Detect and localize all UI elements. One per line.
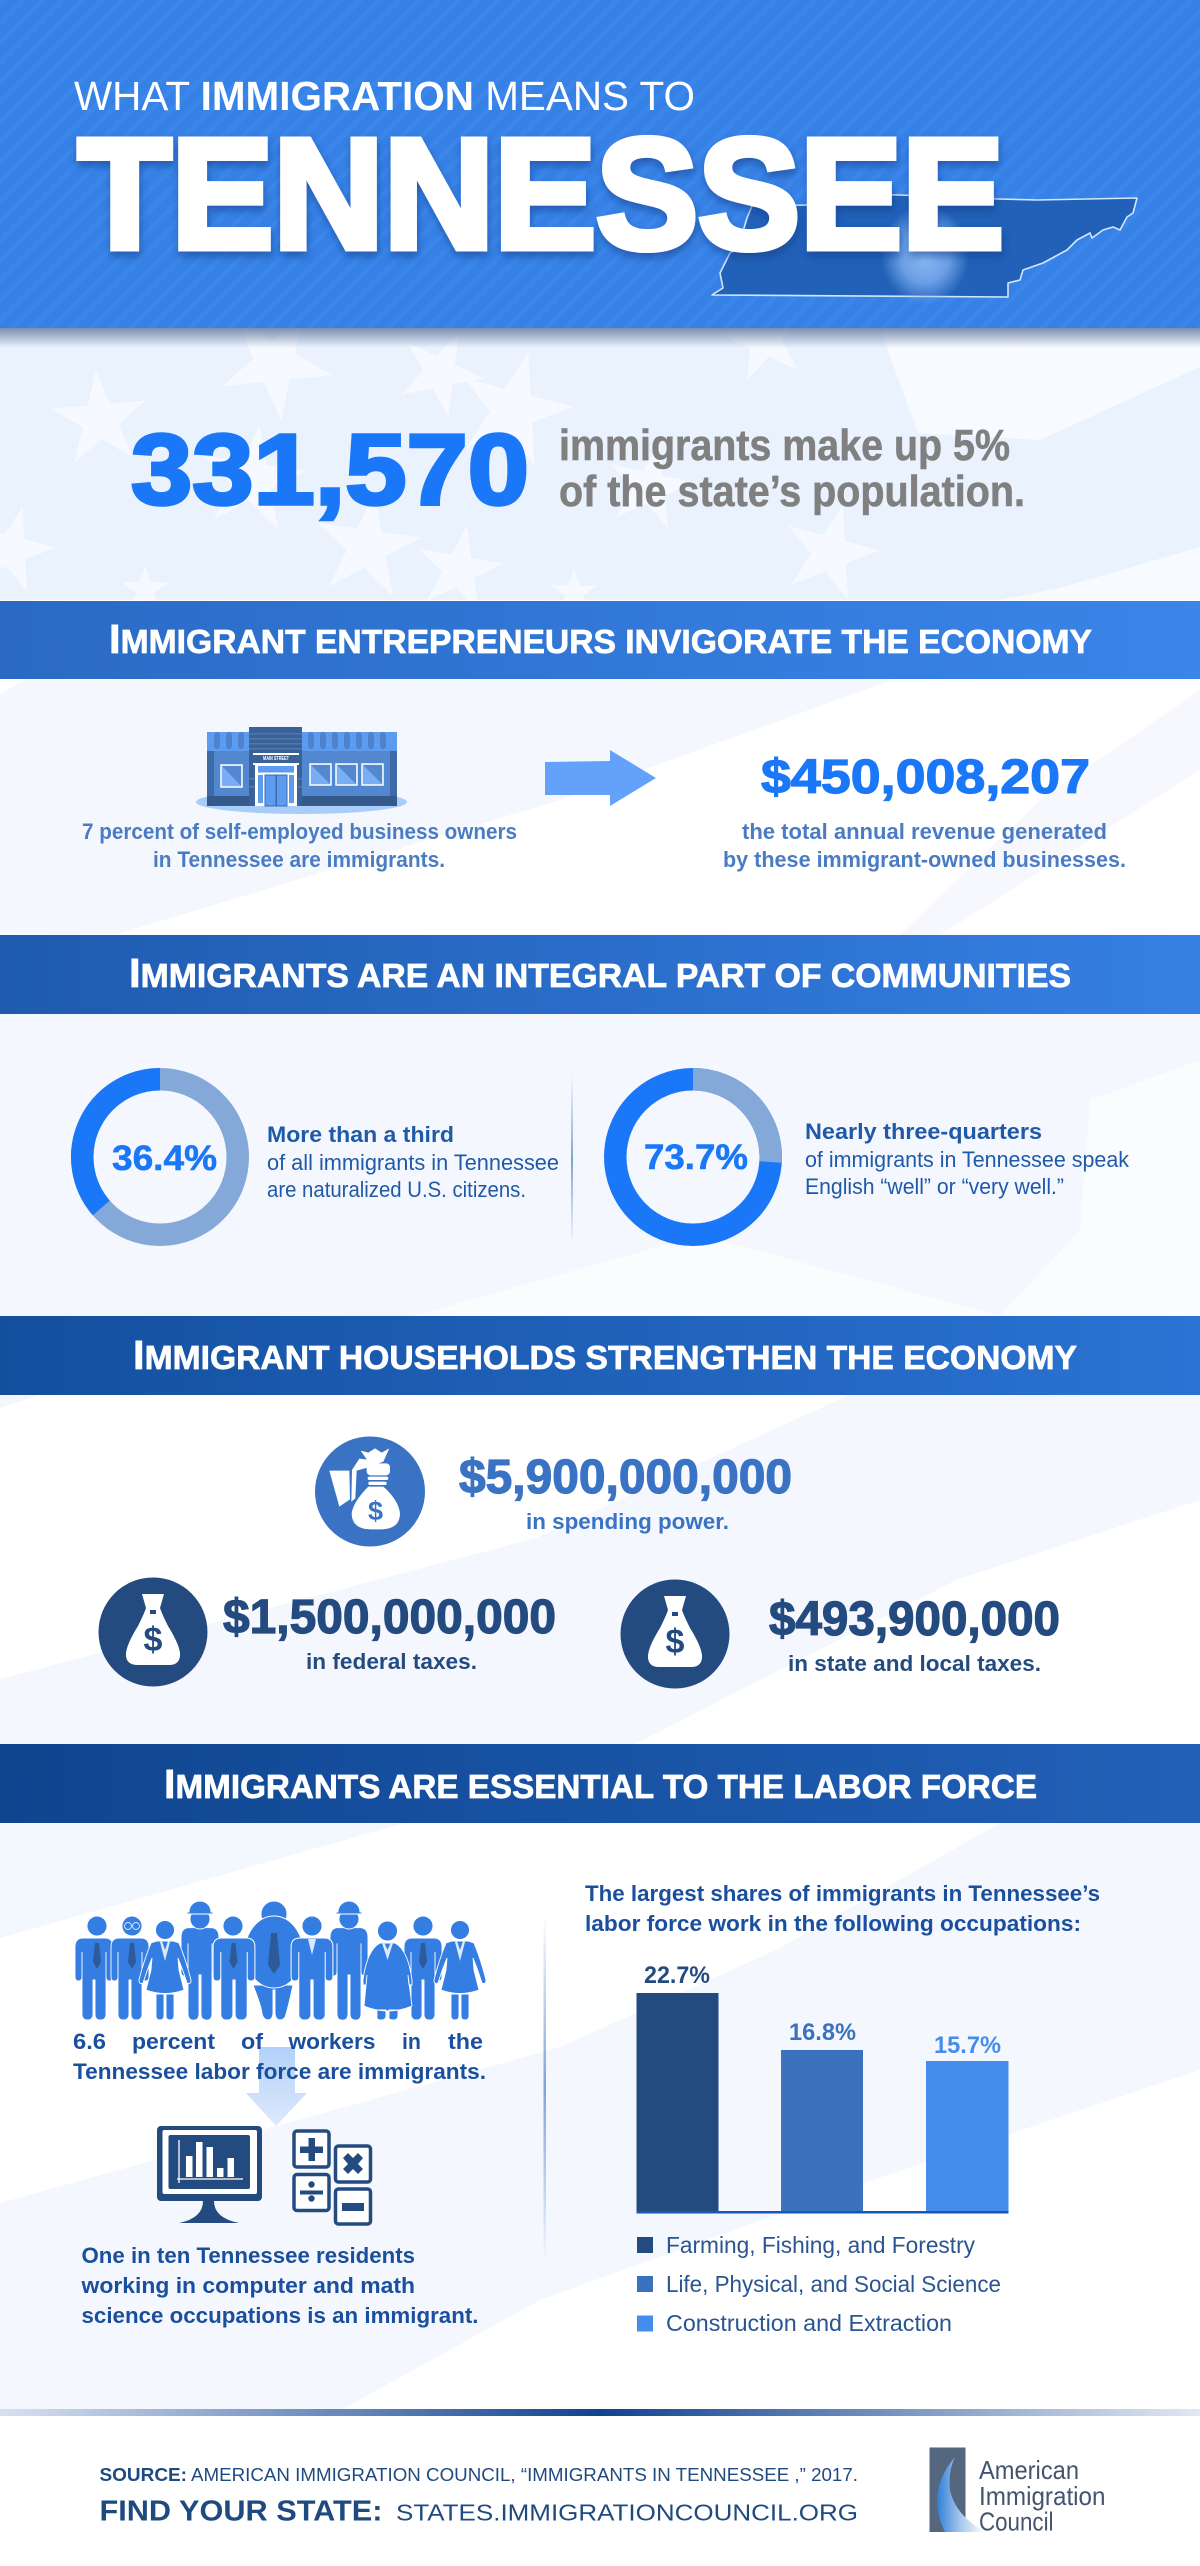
section heading: entrepreneurs (0, 601, 1200, 679)
title state name: TENNESSEE (78, 107, 1004, 282)
panel: entrepreneurs (82, 727, 1126, 872)
donut chart: 36.4 percent (82, 1079, 238, 1235)
revenue description: the total annual revenue generated (742, 819, 1107, 844)
divider (544, 1913, 546, 2263)
find your state line: STATES.IMMIGRATIONCOUNCIL.ORG (396, 2500, 858, 2526)
section heading: labor force: IMMIGRANTS ARE ESSENTIAL TO THE LABOR FORCE (164, 1761, 1037, 1807)
chart legend: Construction and Extraction (666, 2310, 952, 2336)
bar chart: occupations: 16.8% (789, 2019, 856, 2046)
section heading: households: IMMIGRANT HOUSEHOLDS STRENGTHEN THE ECONOMY (133, 1332, 1077, 1378)
down arrow (246, 2047, 307, 2126)
citizens text: of all immigrants in Tennessee (267, 1150, 559, 1175)
icon: computer monitor with chart (157, 2126, 262, 2223)
computer and math text: working in computer and math (80, 2273, 415, 2298)
shop sign: MAIN STREET (263, 756, 289, 762)
computer and math text: One in ten Tennessee residents (82, 2243, 415, 2268)
section heading: households (0, 1316, 1200, 1395)
title kicker: WHAT IMMIGRATION MEANS TO (74, 73, 695, 119)
labor force share text: workers (287, 2029, 376, 2054)
state taxes label: in state and local taxes. (788, 1651, 1041, 1676)
federal taxes label: in federal taxes. (306, 1649, 477, 1674)
logo: American Immigration Council: American (979, 2455, 1079, 2485)
section heading: communities (0, 935, 1200, 1014)
English text: English “well” or “very well.” (805, 1174, 1064, 1199)
citizens text: are naturalized U.S. citizens. (267, 1177, 526, 1202)
spending power figure: $5,900,000,000 (459, 1451, 792, 1504)
bar chart: occupations: 22.7% (644, 1962, 710, 1989)
icon: money bag, federal: $ (144, 1621, 163, 1659)
revenue description (723, 819, 1126, 872)
labor force share text: percent (132, 2029, 216, 2054)
computer and math text (80, 2243, 479, 2328)
icon: money bag, federal (98, 1578, 208, 1686)
section heading: entrepreneurs: IMMIGRANT ENTREPRENEURS INVIGORATE THE ECONOMY (109, 616, 1092, 662)
English text (805, 1119, 1130, 1199)
labor force share text: the (448, 2029, 483, 2054)
map of Tennessee (712, 194, 1137, 305)
business owners text: 7 percent of self-employed business owners (82, 819, 517, 844)
computer and math text: science occupations is an immigrant. (82, 2303, 478, 2328)
icon: money bag, state (620, 1580, 730, 1688)
icon: hand holding money bag: $ (368, 1496, 383, 1526)
business owners text: in Tennessee are immigrants. (153, 847, 445, 872)
icon: money bag, state: $ (666, 1623, 685, 1661)
occupations heading: labor force work in the following occupations: (585, 1911, 1081, 1936)
spending power label: in spending power. (526, 1509, 729, 1534)
chart legend: Life, Physical, and Social Science (666, 2271, 1001, 2297)
labor force share text: of (241, 2029, 264, 2054)
icon: hand holding money bag (315, 1436, 425, 1546)
chart legend: Farming, Fishing, and Forestry (666, 2232, 975, 2258)
population share text: of the state’s population. (559, 467, 1025, 516)
icon: math symbols (294, 2131, 370, 2224)
panel: communities (82, 1075, 1130, 1245)
labor force share text (73, 2029, 486, 2084)
divider (571, 1075, 573, 1245)
English text: of immigrants in Tennessee speak (805, 1147, 1130, 1172)
revenue figure: $450,008,207 (761, 751, 1090, 804)
federal taxes figure: $1,500,000,000 (223, 1591, 556, 1644)
header banner (0, 0, 1200, 348)
icon: group of workers (75, 1901, 486, 2020)
chart legend (637, 2232, 1001, 2336)
headline statistic (131, 414, 1025, 526)
immigrant count: 331,570 (131, 414, 529, 526)
labor force share text: 6.6 (73, 2029, 106, 2054)
labor force share text: Tennessee labor force are immigrants. (73, 2059, 486, 2084)
English text: Nearly three-quarters (805, 1119, 1042, 1144)
find your state line (100, 2496, 858, 2528)
source line: SOURCE: (100, 2465, 187, 2485)
citizens text (267, 1122, 559, 1202)
section heading: communities: IMMIGRANTS ARE AN INTEGRAL PART OF COMMUNITIES (129, 950, 1071, 996)
state taxes figure: $493,900,000 (769, 1593, 1060, 1646)
find your state line: FIND YOUR STATE: (100, 2496, 382, 2528)
section heading: labor force (0, 1744, 1200, 1823)
donut chart: 36.4 percent: 36.4% (112, 1139, 217, 1178)
citizens text: More than a third (267, 1122, 454, 1147)
population share text (559, 421, 1025, 516)
bar chart: occupations (636, 1962, 1008, 2214)
footer (0, 2409, 1200, 2566)
bar chart: occupations: 15.7% (934, 2032, 1001, 2059)
logo: American Immigration Council: Council (979, 2506, 1054, 2536)
donut chart: 73.7 percent (615, 1079, 771, 1235)
panel: households (98, 1436, 1060, 1688)
icon: storefront (196, 727, 407, 814)
panel: labor force (73, 1881, 1100, 2336)
population share text: immigrants make up 5% (559, 421, 1010, 470)
arrow (545, 750, 656, 806)
business owners text (82, 819, 517, 872)
revenue description: by these immigrant-owned businesses. (723, 847, 1126, 872)
occupations heading: The largest shares of immigrants in Tennessee’s (585, 1881, 1100, 1906)
source line: AMERICAN IMMIGRATION COUNCIL, “IMMIGRANTS IN TENNESSEE ,” 2017. (191, 2465, 858, 2485)
logo: American Immigration Council: Immigration (979, 2481, 1106, 2511)
occupations heading (585, 1881, 1100, 1936)
labor force share text: in (402, 2029, 421, 2054)
donut chart: 73.7 percent: 73.7% (644, 1138, 748, 1177)
logo: American Immigration Council (930, 2448, 1106, 2536)
